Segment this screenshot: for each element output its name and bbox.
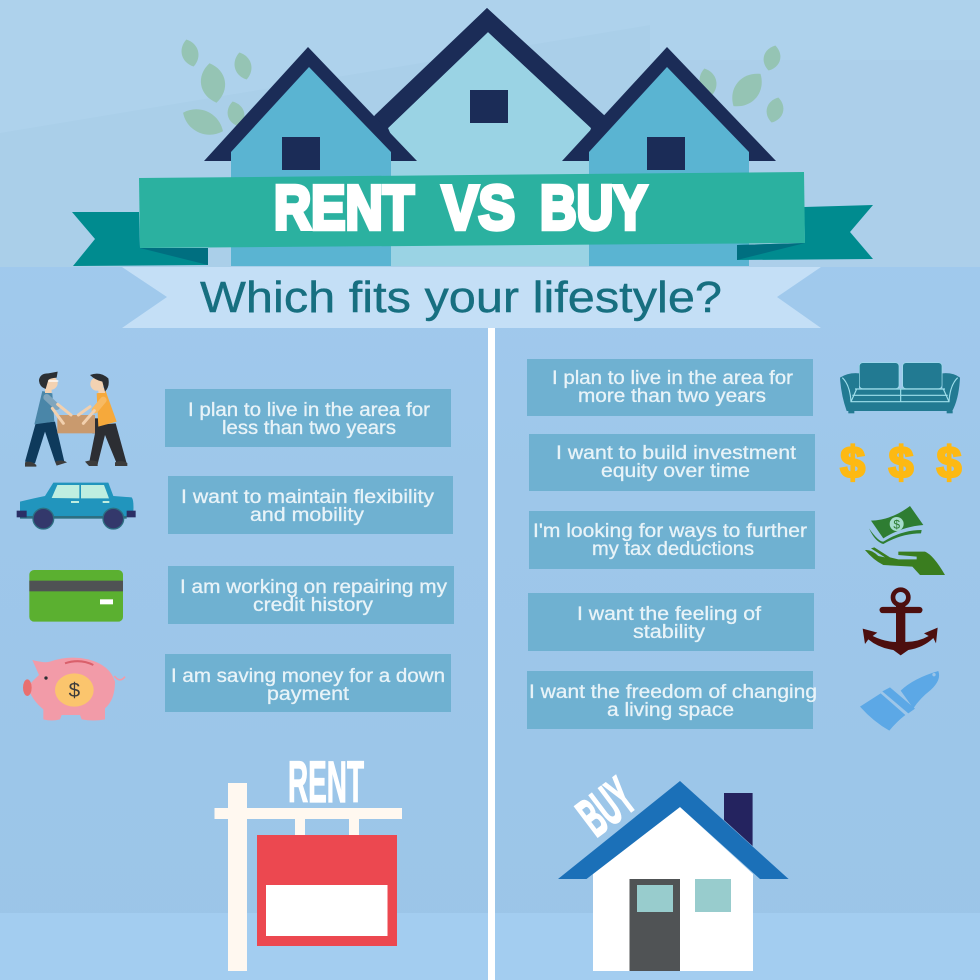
leaves: left cluster xyxy=(178,37,255,141)
icon: dollar signs xyxy=(840,438,962,487)
title: BUY xyxy=(540,174,647,243)
icon: money over hand: $ xyxy=(893,517,900,531)
text box: rent 3: credit history xyxy=(253,595,374,616)
title banner xyxy=(139,172,805,248)
text box: buy 3: I'm looking for ways to further xyxy=(533,521,808,542)
text box: rent 3 xyxy=(168,566,454,624)
window: center house xyxy=(470,90,508,123)
text box: buy 3: my tax deductions xyxy=(592,539,754,560)
text box: buy 4 xyxy=(528,593,814,651)
text box: buy 5 xyxy=(527,671,817,729)
text box: rent 4: payment xyxy=(267,684,350,705)
text box: buy 2 xyxy=(529,434,815,491)
subtitle ribbon xyxy=(122,267,821,328)
buy label: BUY xyxy=(566,766,646,848)
icon: dollar signs: $ xyxy=(937,438,962,487)
window: left house xyxy=(282,137,320,170)
text box: buy 2: equity over time xyxy=(601,461,750,482)
text box: buy 4: I want the feeling of xyxy=(577,604,762,625)
icon: money over hand xyxy=(865,506,945,575)
text box: buy 5: a living space xyxy=(607,700,734,721)
icon: credit card xyxy=(29,570,123,622)
text box: buy 4: stability xyxy=(633,622,706,643)
ribbon tail: left xyxy=(72,212,208,266)
text box: rent 2: I want to maintain flexibility xyxy=(181,487,435,508)
illustration: rent sign xyxy=(214,750,402,971)
right house xyxy=(562,47,776,266)
icon: car xyxy=(17,483,136,529)
icon: piggy bank: $ xyxy=(69,679,81,702)
text box: rent 2: and mobility xyxy=(250,505,365,526)
text box: rent 4 xyxy=(165,654,451,712)
text box: buy 5: I want the freedom of changing xyxy=(529,682,817,703)
icon: piggy bank xyxy=(23,658,125,720)
illustration: rent sign: RENT xyxy=(288,750,364,815)
text box: rent 2 xyxy=(168,476,453,534)
text box: buy 1: I plan to live in the area for xyxy=(552,368,794,389)
icon: anchor xyxy=(863,590,938,655)
title: VS xyxy=(442,174,515,243)
window: right house xyxy=(647,137,685,170)
illustration: buy house xyxy=(558,766,789,971)
icon: two people carrying a box xyxy=(25,372,127,467)
text box: buy 1 xyxy=(527,359,813,416)
icon: dollar signs: $ xyxy=(840,438,865,487)
text box: buy 3 xyxy=(529,511,815,569)
title: RENT xyxy=(274,174,414,243)
text box: rent 3: I am working on repairing my xyxy=(180,577,448,598)
text box: buy 2: I want to build investment xyxy=(556,443,797,464)
leaves: right cluster xyxy=(696,43,786,125)
text box: rent 4: I am saving money for a down xyxy=(171,666,445,687)
icon: sofa xyxy=(840,363,960,413)
text box: buy 1: more than two years xyxy=(578,386,766,407)
center divider xyxy=(488,328,495,980)
text box: rent 1: I plan to live in the area for xyxy=(188,400,431,421)
icon: dollar signs: $ xyxy=(889,438,914,487)
ribbon tail: right xyxy=(737,205,873,260)
text box: rent 1: less than two years xyxy=(222,418,396,439)
center house xyxy=(340,8,640,266)
text box: rent 1 xyxy=(165,389,451,447)
icon: paint brush xyxy=(860,671,939,731)
left house xyxy=(204,47,417,266)
subtitle: Which fits your lifestyle? xyxy=(200,273,722,322)
